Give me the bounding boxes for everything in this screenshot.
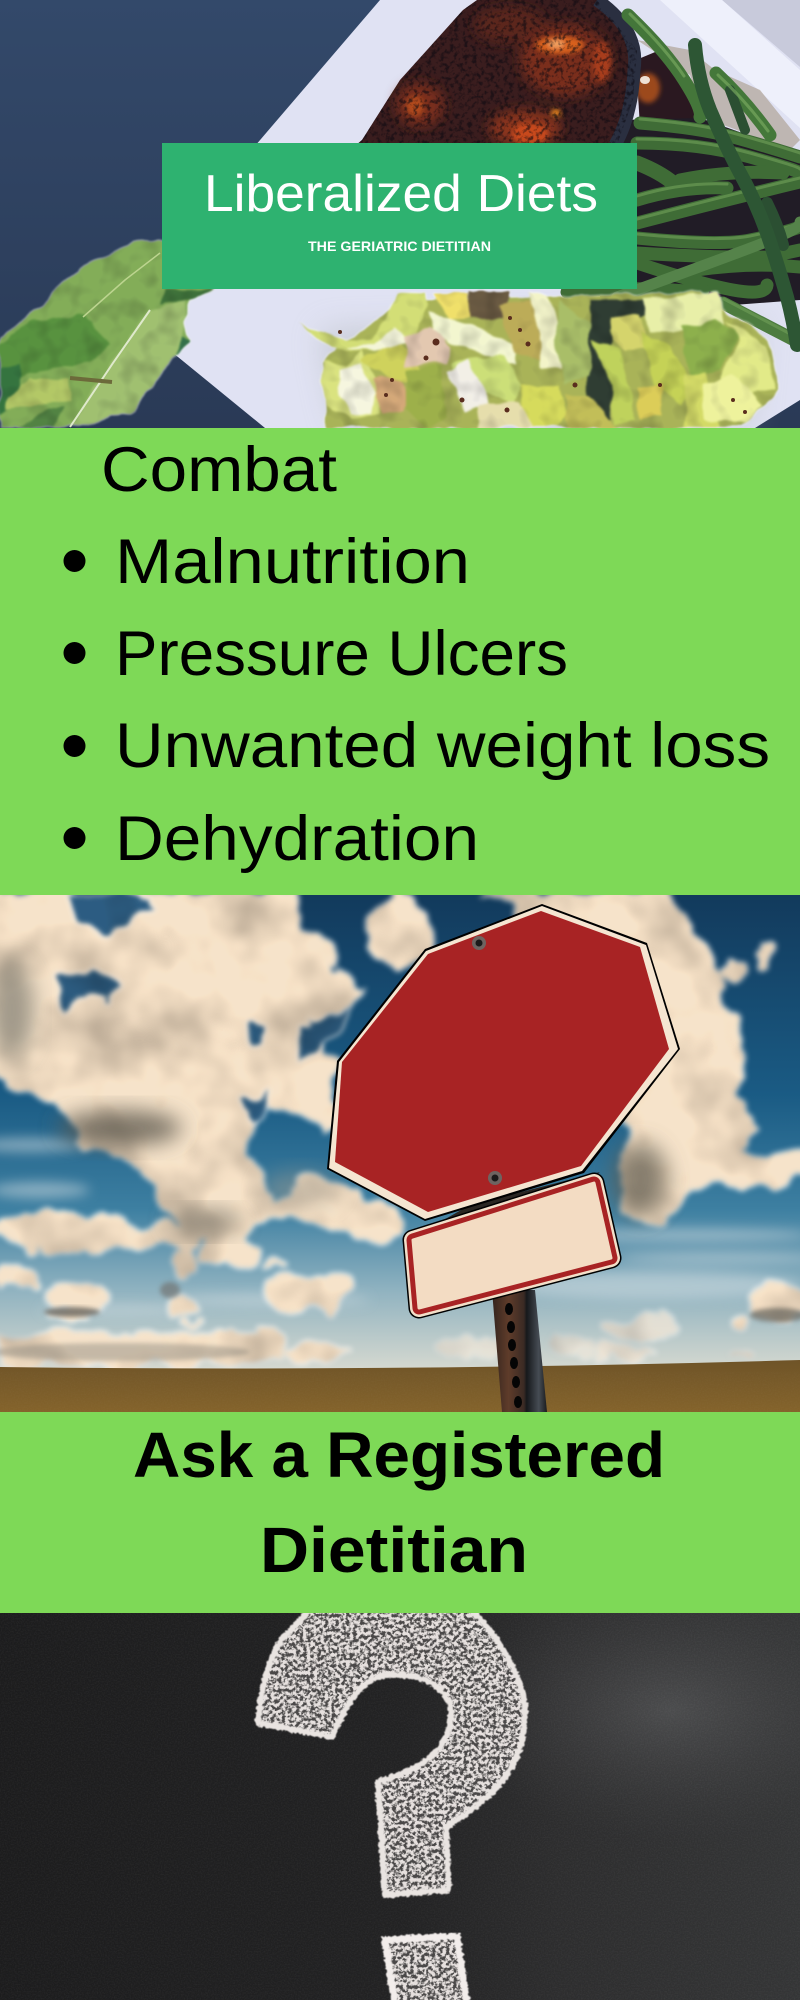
heading line 2: Dietitian	[260, 1514, 528, 1586]
clouds	[0, 890, 800, 1366]
list item: Pressure Ulcers: Pressure Ulcers	[115, 619, 568, 689]
title box	[162, 143, 637, 289]
icon: blank stop sign	[327, 904, 680, 1222]
field	[0, 1360, 800, 1412]
panel: chalkboard photo	[0, 1580, 800, 2000]
list item: Malnutrition: Malnutrition	[115, 527, 470, 597]
heading: Liberalized Diets: Liberalized Diets	[204, 165, 598, 223]
icon: plate sauce stain	[636, 40, 800, 150]
icon: chalk question mark	[258, 1608, 525, 2000]
icon: sign post	[492, 1290, 547, 1412]
panel: combat list	[0, 428, 800, 895]
pale sky streaks	[0, 1138, 800, 1315]
heading: Combat: Combat	[101, 435, 338, 505]
subtitle: THE GERIATRIC DIETITIAN	[308, 238, 491, 254]
lettuce spots	[338, 316, 747, 414]
list item: Dehydration: Dehydration	[115, 804, 479, 874]
icon: white plate	[117, 0, 800, 428]
heading line 1: Ask a Registered	[133, 1419, 665, 1491]
cloud shadows	[0, 960, 800, 1361]
table right corner	[722, 0, 800, 67]
panel: stop sign photo	[0, 890, 800, 1412]
icon: glazed fish	[350, 0, 640, 150]
panel: food photo banner	[0, 0, 800, 428]
list item: Unwanted weight loss: Unwanted weight loss	[115, 711, 770, 781]
icon: mint leaf	[0, 240, 215, 428]
icon: green beans	[567, 14, 800, 345]
icon: lettuce salad	[297, 290, 780, 428]
rivets	[472, 936, 486, 950]
dot	[385, 1936, 467, 2000]
sky gaps in the big cloud	[52, 895, 355, 1130]
panel: ask a registered dietitian	[0, 1412, 800, 1613]
icon: blank sign panel	[413, 1183, 611, 1308]
icon: dark backdrop under beans	[600, 118, 800, 306]
